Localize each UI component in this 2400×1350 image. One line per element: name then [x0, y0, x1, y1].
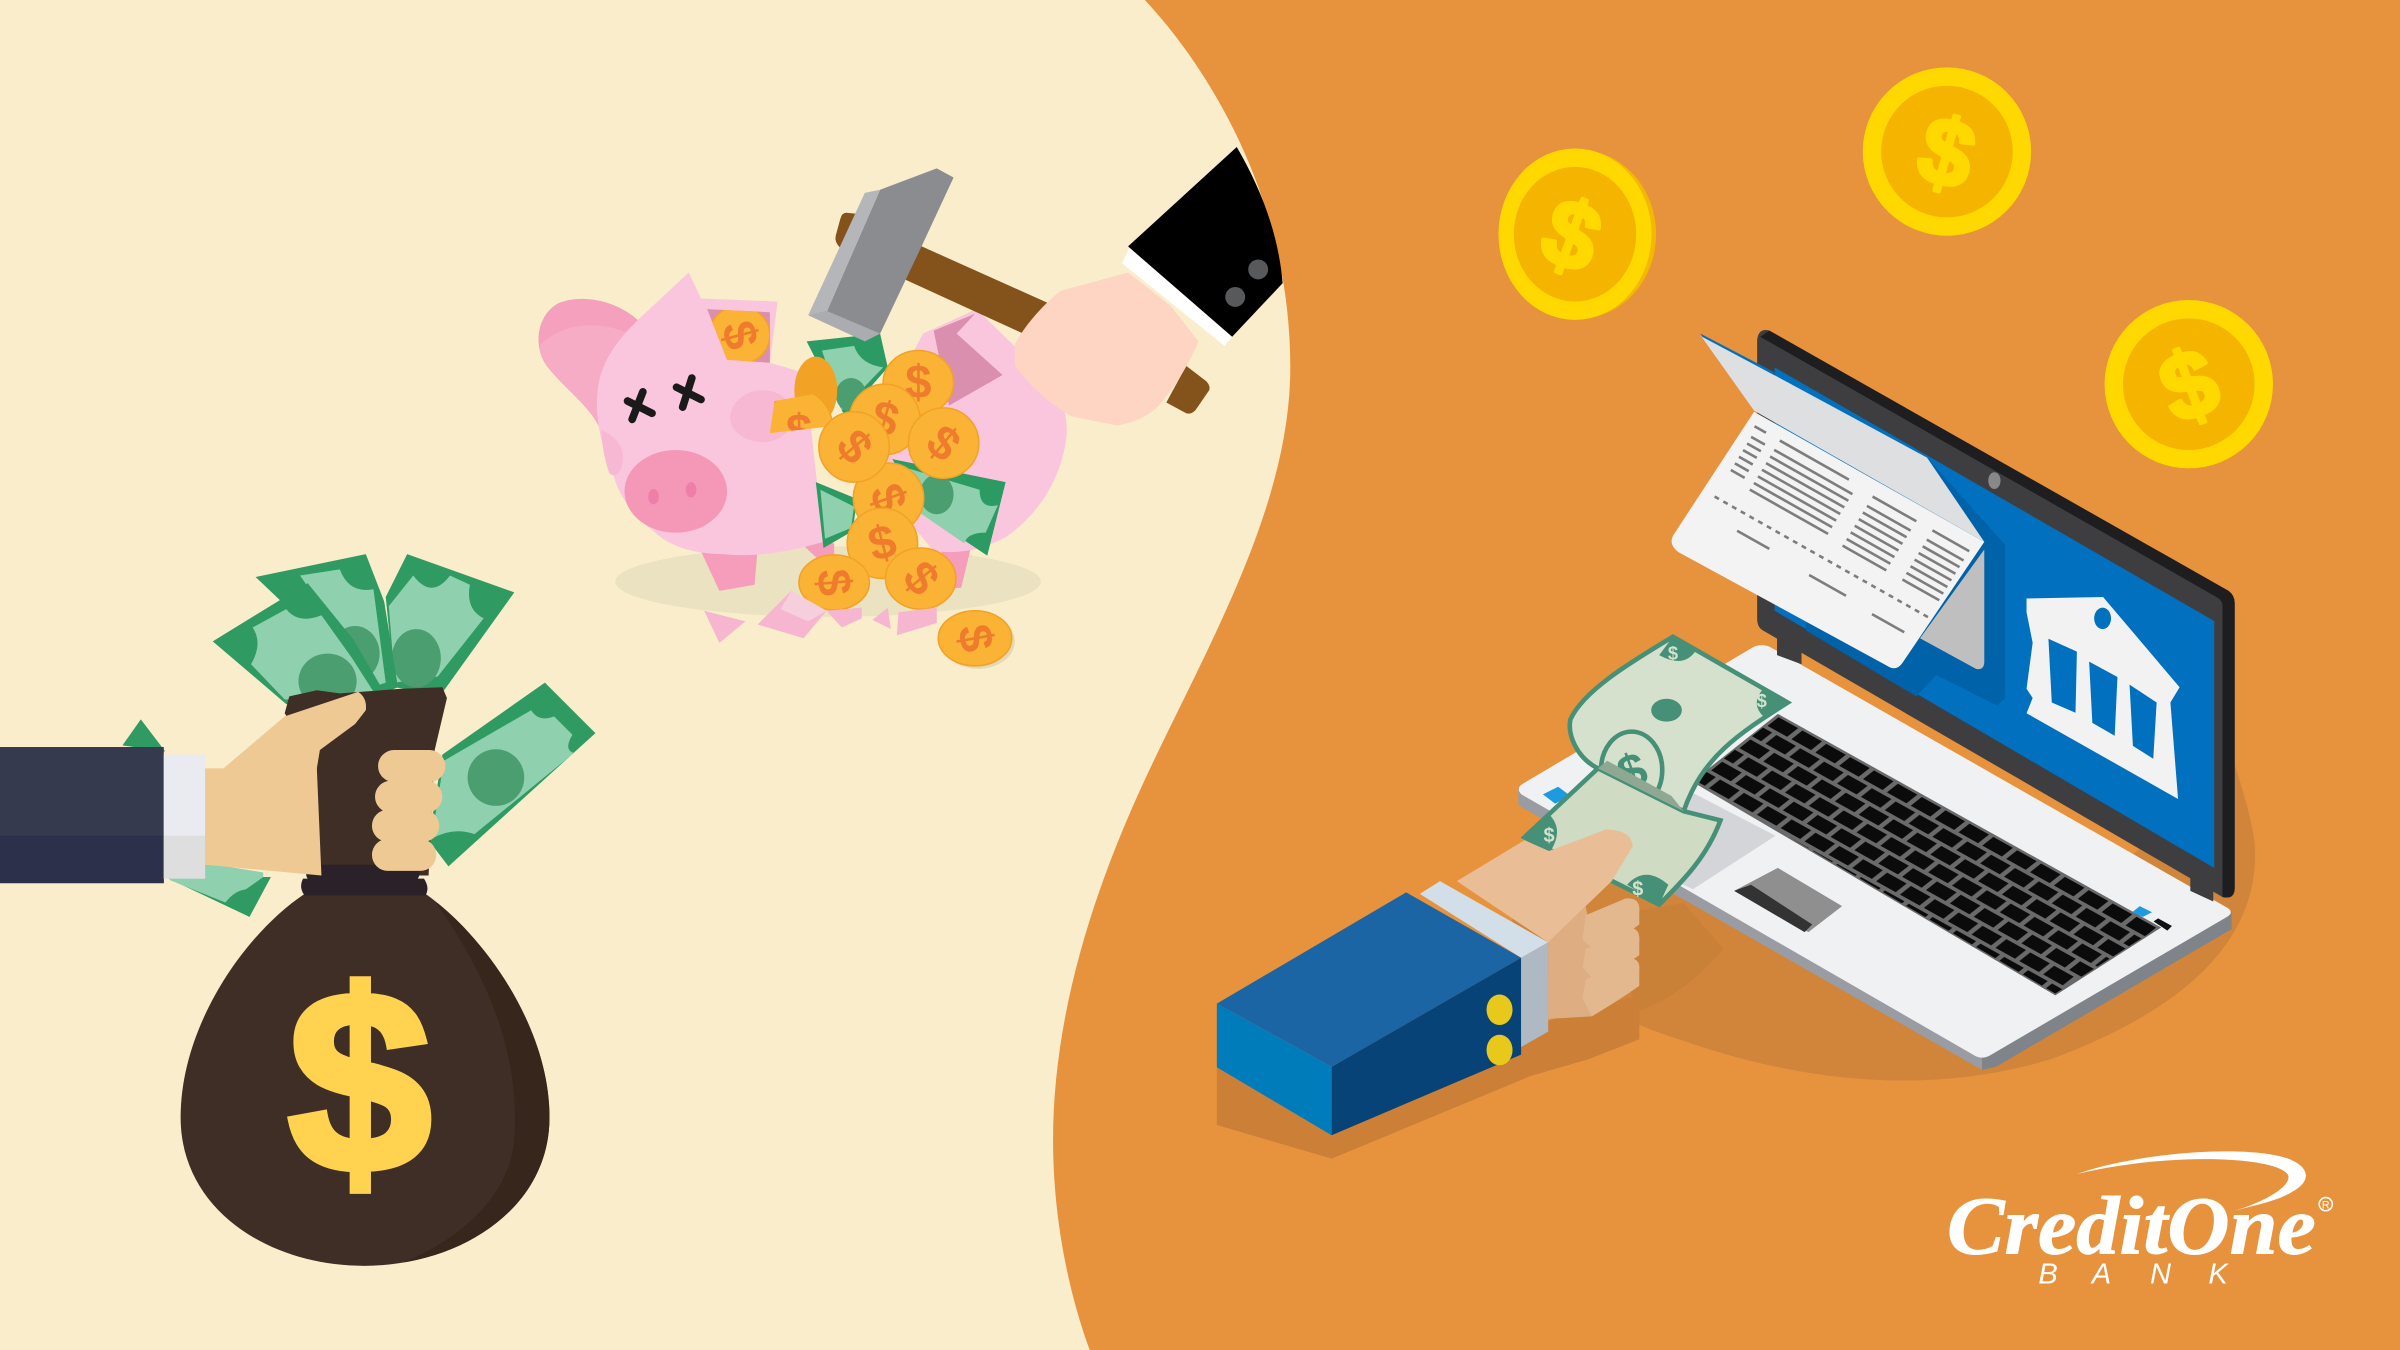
thumb and back of hand: [1457, 830, 1633, 942]
bag neck: [285, 687, 447, 876]
white cuff: [1122, 248, 1232, 346]
coin: [847, 508, 918, 579]
cuff shade: [164, 836, 205, 879]
logo subtitle: BANK: [2038, 1258, 2229, 1290]
coin: [819, 412, 889, 482]
coin: [799, 555, 869, 610]
loose coin: $: [947, 621, 1004, 656]
laptop shadow: [1506, 765, 2255, 1081]
hole in pig: [707, 309, 770, 363]
webcam: [1988, 472, 2001, 489]
jacket sleeve top: [1217, 892, 1521, 1067]
shell shards: [704, 591, 937, 643]
banknotes behind the bag: [122, 554, 595, 917]
hand inserting cash: [1217, 637, 1788, 1159]
coin left: [1498, 148, 1656, 320]
coin right: [2105, 300, 2273, 468]
bank icon: [2027, 597, 2180, 799]
pig snout: [624, 450, 727, 533]
registered mark: [2319, 1198, 2332, 1211]
inside of right shell: [934, 314, 1003, 406]
ground shadow: [615, 546, 1041, 617]
coin: $: [825, 420, 883, 474]
trackpad strip: [1734, 885, 1812, 932]
upper banknote: [1570, 637, 1788, 811]
receipt sheet: [1672, 412, 1984, 668]
hand shadow: [1217, 995, 1639, 1159]
pig cheeks: [602, 390, 796, 475]
floating gold coins: [1498, 67, 2273, 468]
jacket sleeve right face: [1332, 958, 1521, 1135]
logo wordmark: CreditOne: [1947, 1180, 2316, 1272]
coin: $: [865, 390, 904, 448]
right half of pig: [857, 309, 1067, 552]
hammer head bottom: [808, 311, 880, 341]
coin: [853, 463, 924, 533]
coin fragment: [770, 394, 832, 433]
upper banknote: $: [1668, 643, 1678, 664]
rope tie: [301, 865, 427, 895]
broken piggy bank: [536, 272, 1067, 669]
logo swoosh: [2077, 1151, 2306, 1211]
handle right end: [1166, 366, 1210, 414]
keyboard: [1693, 715, 2160, 994]
flap top edge: [1701, 334, 1774, 375]
money bag with hand: [0, 554, 595, 1270]
shirt cuff side: [1521, 942, 1548, 1047]
base side left: [1518, 787, 1982, 1070]
shirt cuff: [164, 755, 205, 879]
loose coin: [938, 611, 1015, 669]
lower banknote: $: [1543, 825, 1555, 847]
coin top: [1863, 67, 2031, 236]
hammer handle: [903, 245, 1052, 337]
hammer and hand: [808, 147, 1283, 426]
coin: $: [806, 567, 861, 598]
base shading: [1670, 790, 1776, 889]
shirt cuff top: [1420, 881, 1548, 958]
hinges: [1777, 612, 2213, 902]
hand palm and thumb: [205, 692, 366, 876]
bag dollar sign: $: [288, 939, 431, 1226]
coin right: $: [2146, 327, 2232, 445]
handle left end: [835, 213, 862, 253]
coin fragment: $: [786, 405, 812, 458]
hammer head light side: [808, 190, 880, 315]
coin: [849, 384, 920, 455]
coin in hole: $: [710, 316, 768, 355]
screen frame: [1757, 330, 2235, 898]
bag body: [181, 894, 549, 1266]
coin: [883, 351, 954, 415]
fist: [1015, 272, 1198, 426]
coin top: $: [1907, 95, 1986, 211]
pig legs: [699, 536, 972, 591]
registered mark: R: [2322, 1199, 2330, 1211]
status lights: [1543, 787, 2172, 931]
upper banknote: $: [1757, 690, 1767, 711]
base top: [1519, 645, 2231, 1058]
receipt shadow on screen: [1806, 458, 2005, 706]
left half of pig: [597, 272, 823, 555]
hammer head: [827, 168, 954, 341]
base side right: [1982, 911, 2232, 1070]
lower banknote: $: [1632, 878, 1643, 900]
receipt lines: [1699, 426, 1971, 639]
banknotes in pig: [807, 334, 1006, 556]
coin: $: [863, 514, 902, 572]
coin: $: [916, 415, 970, 472]
upper banknote: $: [1610, 742, 1654, 802]
pig eyes: [628, 378, 701, 419]
screen: [1775, 367, 2214, 868]
coin: [908, 408, 979, 478]
bag shade: [402, 903, 550, 1263]
pig ear: [539, 299, 651, 429]
coin: $: [905, 356, 932, 409]
receipt underside: [1920, 549, 1984, 669]
coin left: $: [1528, 177, 1614, 295]
shadow of hand on laptop side: [1592, 903, 1723, 1010]
cuff buttons: [1487, 994, 1513, 1065]
jacket sleeve left face: [1217, 1004, 1332, 1135]
black sleeve: [1128, 147, 1283, 337]
coin: $: [859, 477, 917, 520]
fingers: [372, 750, 445, 871]
sleeve: [0, 747, 164, 883]
pig ear inner: [540, 326, 626, 426]
Credit One Bank logo: [1947, 1151, 2332, 1290]
frame dark edge: [1760, 331, 2235, 898]
sleeve shade: [0, 836, 164, 883]
coin: $: [892, 551, 950, 606]
sleeve buttons: [1225, 259, 1268, 307]
orange background wave: [1053, 0, 2400, 1350]
receipt flap: [1701, 335, 1984, 542]
laptop: [1506, 330, 2255, 1081]
lower banknote: [1524, 761, 1720, 905]
palm side: [1548, 906, 1599, 1019]
trackpad: [1734, 868, 1842, 932]
nostrils: [648, 482, 696, 504]
fingers: [1583, 898, 1639, 1016]
gold coin cluster: [765, 351, 979, 610]
